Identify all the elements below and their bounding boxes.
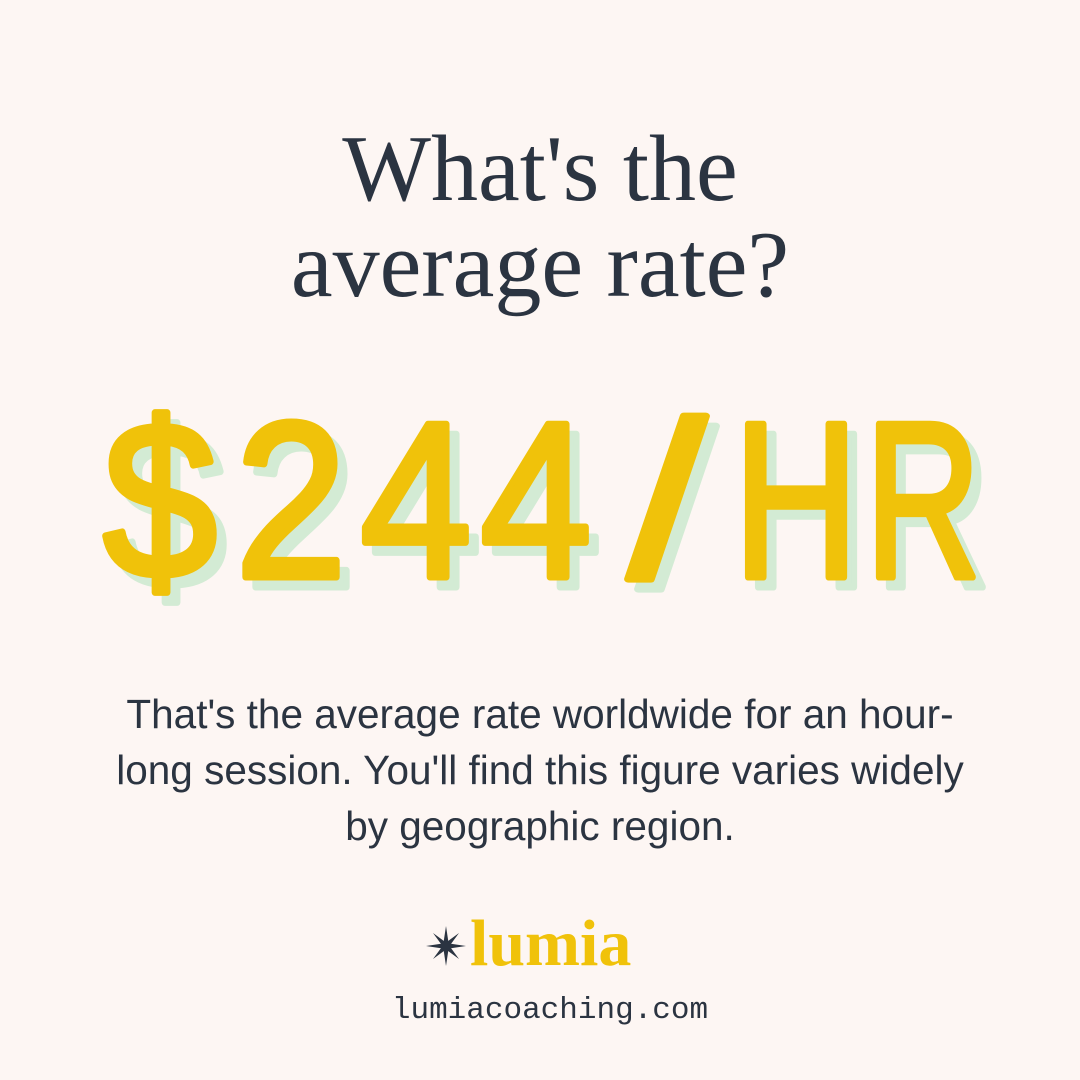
title <box>291 117 789 317</box>
logo <box>426 907 631 980</box>
body text: by geographic region. <box>345 803 735 849</box>
website url: lumiacoaching.com <box>392 993 708 1028</box>
big rate number: / <box>628 380 706 620</box>
body text <box>116 691 964 849</box>
body text: long session. You'll find this figure varies widely <box>116 747 964 793</box>
title: What's the <box>342 117 738 221</box>
body text: That's the average rate worldwide for an hour- <box>126 691 954 737</box>
icon: star <box>426 926 466 966</box>
logo wordmark: lumia <box>470 907 631 980</box>
title: average rate? <box>291 213 789 317</box>
big rate number <box>102 380 991 620</box>
